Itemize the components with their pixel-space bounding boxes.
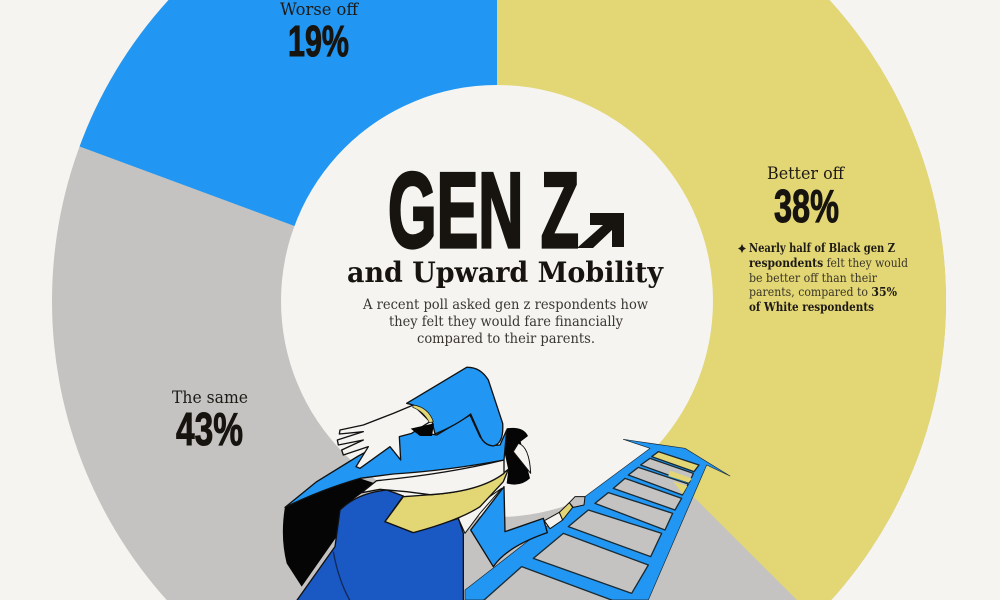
- description: [362, 297, 648, 347]
- description: they felt they would fare financially: [389, 314, 623, 330]
- label: better off: [767, 164, 846, 232]
- figure: face: [513, 443, 531, 473]
- figure: jacket seam: [333, 552, 350, 600]
- label: the same: 43%: [176, 403, 243, 455]
- ladder cells: [483, 467, 688, 600]
- subtitle: and Upward Mobility: [347, 256, 664, 289]
- figure: sleeve shadow: [411, 423, 434, 436]
- callout: better off note: parents, compared to 35%: [749, 285, 898, 299]
- label: worse off: 19%: [288, 17, 349, 66]
- wrist: [544, 512, 563, 529]
- callout: better off note: [738, 241, 908, 314]
- label: worse off: [280, 0, 360, 66]
- figure: yellow tie: [385, 469, 508, 533]
- figure: gripping hand: [544, 497, 585, 529]
- figure: white scarf: [362, 460, 504, 495]
- figure: dark blue jacket: [297, 490, 463, 600]
- gripping cuff: [559, 503, 573, 520]
- icon: diamond bullet: [738, 244, 746, 253]
- callout: better off note: of White respondents: [749, 300, 874, 314]
- label: the same: [172, 388, 248, 455]
- centre circle: [281, 85, 713, 517]
- figure: raised hand: [337, 405, 430, 468]
- illustration: figure climbing ladder: [283, 367, 730, 600]
- figure: lower arm: [471, 487, 547, 567]
- description: A recent poll asked gen z respondents how: [362, 297, 648, 313]
- label: the same: The same: [172, 388, 248, 408]
- figure: blue cape top: [285, 415, 507, 507]
- gripping fingers: [569, 497, 585, 507]
- callout: better off note: be better off than their: [749, 271, 877, 285]
- ladder arrow: [465, 439, 730, 600]
- segment: worse off 19%: [80, 0, 497, 226]
- figure: raised sleeve: [407, 367, 503, 446]
- figure: shirt: [458, 488, 502, 533]
- ladder yellow patches: [668, 471, 692, 494]
- label: worse off: Worse off: [280, 0, 360, 20]
- callout: better off note: Nearly half of Black gen Z: [749, 241, 895, 255]
- segment: better off 38%: [497, 0, 946, 600]
- figure: cuff: [413, 405, 433, 423]
- figure: hair: [504, 428, 530, 485]
- ladder top cells: [641, 452, 699, 483]
- label: better off: 38%: [774, 180, 839, 232]
- label: better off: Better off: [767, 164, 846, 184]
- figure: black cape: [283, 478, 375, 587]
- ladder frame: [465, 439, 730, 600]
- icon: upward arrow: [577, 213, 624, 248]
- callout: better off note: respondents felt they would: [749, 256, 908, 270]
- title: GEN Z: GEN Z: [388, 150, 579, 270]
- description: compared to their parents.: [417, 331, 595, 347]
